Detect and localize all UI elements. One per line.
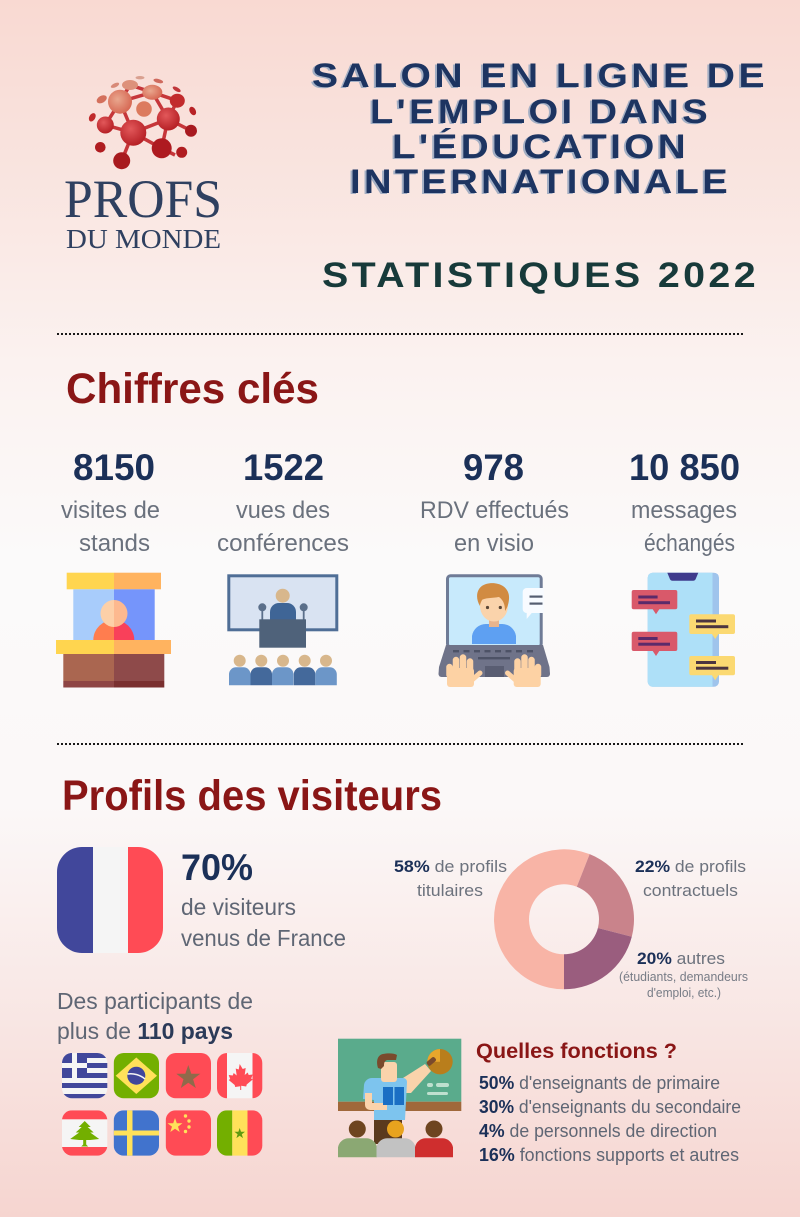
list of functions: 50% d'enseignants de primaire (479, 1073, 720, 1093)
label visiteurs de France (181, 894, 346, 951)
logo network icon (87, 76, 198, 169)
label visites de stands: stands (79, 530, 150, 557)
label visites de stands: visites de (61, 497, 160, 524)
number 70%: 70% (181, 847, 253, 888)
logo: Profs du Monde (64, 76, 222, 254)
list of functions: 16% fonctions supports et autres (479, 1145, 739, 1165)
number 1522: 1522 (243, 447, 324, 488)
panel: stat vues des conférences (217, 447, 349, 685)
flags grid (62, 1053, 263, 1156)
icon: laptop visio (438, 576, 550, 687)
icon: phone messages (632, 573, 735, 687)
panel: Quelles fonctions (476, 1040, 741, 1165)
heading: Chiffres clés: Chiffres clés (66, 365, 319, 413)
list of functions (479, 1073, 741, 1165)
label RDV effectués en visio: en visio (454, 530, 534, 557)
flag: Sweden (114, 1110, 160, 1156)
label RDV effectués en visio (420, 497, 569, 557)
label visites de stands (61, 497, 160, 557)
subtitle: STATISTIQUES 2022 (322, 256, 759, 295)
label 22% contractuels: 22% de profils (635, 857, 746, 876)
icon: teacher at blackboard (338, 1039, 461, 1157)
flag: Greece (62, 1053, 108, 1099)
title: SALON EN LIGNE DE (312, 57, 768, 95)
logo wordmark: DU MONDE (66, 224, 221, 254)
heading: Quelles fonctions: Quelles fonctions ? (476, 1040, 677, 1063)
label messages échangés (631, 497, 737, 557)
label vues des conférences: conférences (217, 530, 349, 557)
label 20% autres: (étudiants, demandeurs (619, 969, 748, 984)
donut chart (494, 849, 634, 989)
label 22% contractuels (635, 857, 746, 900)
label messages échangés: messages (631, 497, 737, 524)
panel: stat messages échangés (629, 447, 740, 687)
label vues des conférences: vues des (236, 497, 330, 524)
label 58% titulaires: titulaires (417, 881, 483, 900)
panel: stat visites de stands (56, 447, 171, 688)
title: INTERNATIONALE (350, 163, 731, 201)
label 58% titulaires (394, 857, 507, 900)
flag: Morocco (166, 1053, 212, 1099)
title (312, 57, 768, 201)
number 8150: 8150 (73, 447, 155, 488)
list of functions: 30% d'enseignants du secondaire (479, 1097, 741, 1117)
heading: Profils des visiteurs: Profils des visiteurs (62, 772, 442, 820)
text: participants de 110 pays: plus de 110 pays (57, 1018, 233, 1044)
label visiteurs de France: de visiteurs (181, 894, 296, 920)
label visiteurs de France: venus de France (181, 925, 346, 951)
label 20% autres: d'emploi, etc.) (647, 985, 721, 1000)
panel: stat RDV effectués (420, 447, 569, 687)
number 10 850: 10 850 (629, 447, 740, 488)
label 20% autres: 20% autres (637, 949, 725, 968)
list of functions: 4% de personnels de direction (479, 1121, 717, 1141)
label vues des conférences (217, 497, 349, 557)
panel: donut chart of profiles (394, 849, 748, 1000)
flag: China (166, 1110, 212, 1156)
panel: France (57, 847, 346, 953)
icon: stand (56, 573, 171, 688)
title: L'EMPLOI DANS (370, 93, 711, 131)
flag: Canada (217, 1053, 263, 1099)
logo wordmark (64, 169, 222, 254)
label 58% titulaires: 58% de profils (394, 857, 507, 876)
logo wordmark: PROFS (64, 169, 222, 229)
flag: Brazil (114, 1053, 160, 1099)
text: participants de 110 pays (57, 988, 253, 1044)
title: L'ÉDUCATION (392, 128, 689, 166)
icon: French flag (57, 847, 163, 953)
icon: conference (229, 576, 337, 685)
label RDV effectués en visio: RDV effectués (420, 497, 569, 524)
text: participants de 110 pays: Des participants de (57, 988, 253, 1014)
label 22% contractuels: contractuels (643, 881, 738, 900)
flag: Senegal (217, 1110, 262, 1156)
label messages échangés: échangés (644, 530, 735, 557)
flag: Lebanon (62, 1110, 108, 1156)
label 20% autres (619, 949, 748, 1000)
number 978: 978 (463, 447, 524, 488)
